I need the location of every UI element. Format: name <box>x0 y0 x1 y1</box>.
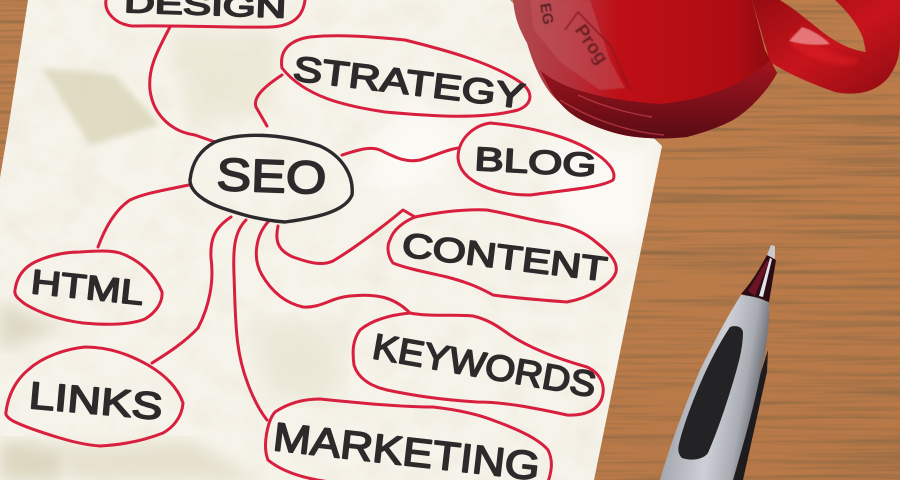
connector: links to SEO <box>152 217 231 363</box>
connector: strategy to SEO <box>255 75 282 126</box>
connector: HTML to SEO <box>98 185 189 247</box>
pen clip <box>733 350 768 480</box>
mind map connectors <box>98 27 458 420</box>
node: blog <box>458 123 614 195</box>
node: keywords: KEYWORDS <box>370 326 599 405</box>
connector: marketing to SEO <box>234 220 267 420</box>
node: marketing <box>266 399 551 480</box>
node: SEO <box>190 135 352 222</box>
node: keywords <box>353 313 603 415</box>
mug reflection of the napkin <box>530 0 630 90</box>
connector: blog to SEO <box>342 148 458 161</box>
node: strategy <box>282 36 530 116</box>
coffee mug <box>513 0 900 138</box>
node: content: CONTENT <box>400 226 609 289</box>
mug body <box>513 0 777 138</box>
pen body <box>660 295 769 480</box>
mug handle <box>752 0 900 94</box>
node: design <box>106 0 305 27</box>
connector: content to SEO <box>277 210 415 264</box>
mug base band <box>540 60 777 138</box>
node: HTML: HTML <box>29 263 146 313</box>
pen nose <box>741 255 776 302</box>
mug reflection of the napkin: Prog <box>570 21 612 68</box>
node: content <box>388 210 616 302</box>
napkin <box>0 0 680 480</box>
pen <box>660 245 776 480</box>
node: SEO: SEO <box>216 148 327 204</box>
pen grip <box>678 326 743 460</box>
node: links: LINKS <box>27 375 164 429</box>
mug reflection of the napkin: EG <box>536 2 557 26</box>
node: links <box>6 347 183 446</box>
node: blog: BLOG <box>474 140 597 183</box>
node: strategy: STRATEGY <box>291 49 527 116</box>
node: HTML <box>15 251 162 324</box>
connector: design to SEO <box>150 27 215 142</box>
connector: keywords to SEO <box>256 222 410 313</box>
